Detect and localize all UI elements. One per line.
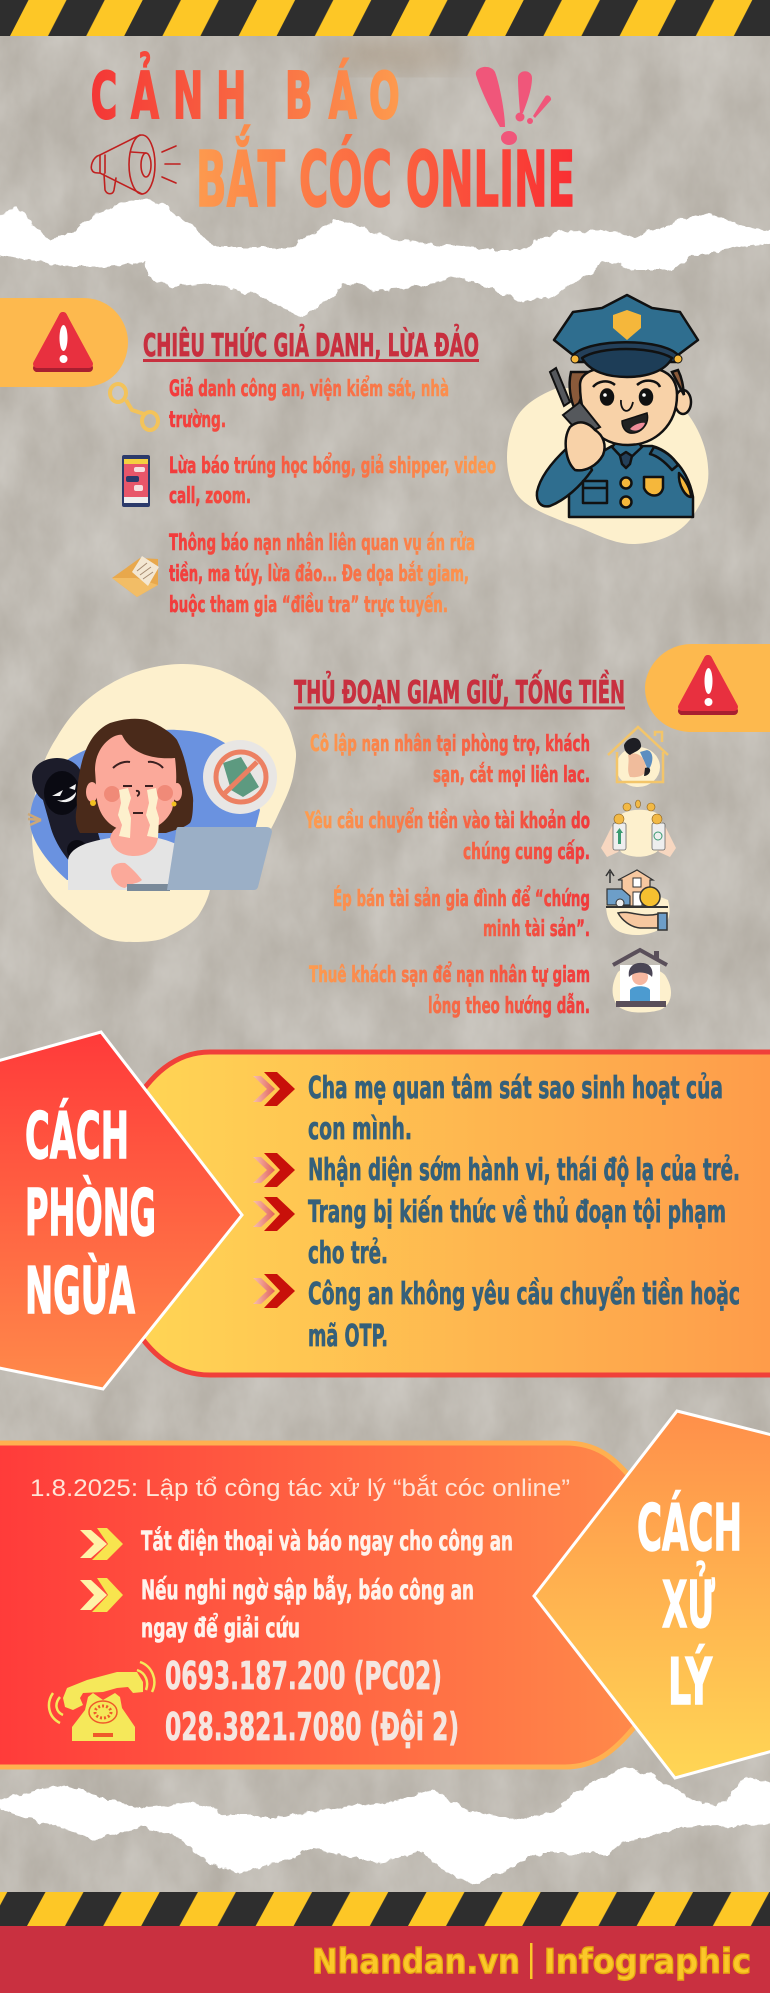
- alert rays: [28, 814, 41, 825]
- cream blob: [32, 664, 296, 942]
- icon: person confined at home: [613, 950, 671, 1013]
- icon: exclamation marks: [476, 67, 551, 145]
- face: [95, 735, 176, 832]
- footer bar: [0, 1926, 770, 1993]
- pentagon label: NGỪA: [25, 1253, 135, 1329]
- heading: [143, 323, 479, 364]
- instruction text: [141, 1526, 513, 1644]
- bullet chevrons: [80, 1528, 123, 1612]
- icon: phones and coins: [601, 800, 676, 857]
- earrings: [90, 800, 176, 806]
- laptop: [127, 827, 272, 891]
- text lines: Yêu cầu chuyển tiền vào tài khoản do: [304, 806, 590, 834]
- text lines: trường.: [169, 407, 226, 433]
- tears: [118, 788, 159, 838]
- torn paper band: bottom: [0, 1767, 770, 1886]
- text lines: Lừa báo trúng học bổng, giả shipper, video: [169, 451, 496, 479]
- icon: telephone: [49, 1662, 154, 1741]
- cheeks: [104, 785, 173, 802]
- top hazard stripe: [0, 0, 770, 36]
- heading: [294, 668, 625, 711]
- icon: phone chat: [122, 455, 150, 507]
- bottom hazard stripe: [0, 1892, 770, 1926]
- bullet chevrons: [253, 1072, 295, 1308]
- text lines: sạn, cắt mọi liên lac.: [433, 761, 590, 788]
- text lines: [169, 374, 496, 618]
- illustration: crying victim with hacker: [28, 664, 296, 942]
- icon: handcuffs: [110, 384, 158, 430]
- text lines: lỏng theo hướng dẫn.: [428, 992, 590, 1019]
- pentagon label: PHÒNG: [25, 1175, 156, 1251]
- instruction text: ngay để giải cứu: [141, 1611, 300, 1644]
- text lines: call, zoom.: [169, 483, 251, 509]
- gradient panel: [0, 1443, 640, 1767]
- pentagon label: XỬ: [662, 1561, 715, 1643]
- hand: [566, 422, 605, 470]
- ears and hair: [570, 370, 691, 414]
- pentagon label: [534, 1411, 770, 1778]
- hooded figure: [32, 758, 100, 880]
- date note: 1.8.2025: Lập tổ công tác xử lý “bắt cóc online”: [30, 1475, 570, 1502]
- pentagon label: [0, 1032, 242, 1389]
- icon: girl in house: [608, 727, 668, 787]
- blue blob: [30, 730, 260, 880]
- text lines: chúng cung cấp.: [463, 838, 590, 865]
- warning tab right: [645, 644, 770, 732]
- hotline numbers: 0693.187.200 (PC02): [165, 1654, 442, 1698]
- panel: cách phòng ngừa: [0, 1032, 770, 1389]
- text lines: tiền, ma túy, lừa đảo... Đe dọa bắt giam,: [169, 560, 469, 587]
- title: CẢNH BÁO: CẢNH BÁO: [91, 53, 400, 134]
- text lines: Thông báo nạn nhân liên quan vụ án rửa: [169, 530, 475, 556]
- cream blob: [507, 388, 708, 544]
- panel: cách xử lý: [0, 1411, 770, 1778]
- sweater: [68, 838, 178, 890]
- hotline numbers: 028.3821.7080 (Đội 2): [165, 1705, 459, 1749]
- icon: megaphone: [91, 135, 180, 194]
- icon: house car money: [606, 870, 670, 935]
- body: [537, 440, 693, 517]
- list text: [308, 1071, 740, 1354]
- warning tab left: [0, 298, 128, 387]
- text lines: Thuê khách sạn để nạn nhân tự giam: [309, 960, 590, 988]
- panel: thủ đoạn giam giữ: [294, 644, 770, 1019]
- text lines: buộc tham gia “điều tra” trực tuyến.: [169, 591, 448, 618]
- head: [580, 366, 677, 445]
- instruction text: Nếu nghi ngờ sập bẫy, báo công an: [141, 1575, 474, 1606]
- text lines: minh tài sản”.: [483, 916, 590, 942]
- woman hair: [76, 719, 193, 833]
- hotline numbers: [165, 1654, 459, 1749]
- hat: [554, 295, 698, 377]
- list text: con mình.: [308, 1112, 412, 1147]
- list text: mã OTP.: [308, 1319, 388, 1354]
- walkie-talkie: [550, 368, 600, 436]
- footer bar: Infographic: [544, 1942, 751, 1982]
- gradient list panel: [130, 1052, 770, 1375]
- instruction text: Tắt điện thoại và báo ngay cho công an: [141, 1526, 513, 1557]
- text lines: Ép bán tài sản gia đình để “chứng: [333, 884, 590, 912]
- hand: [111, 863, 142, 888]
- footer bar: Nhandan.vn: [312, 1942, 520, 1982]
- ears: [86, 782, 182, 802]
- text lines: [304, 731, 590, 1019]
- no-money sign: [203, 740, 277, 814]
- pentagon label: LÝ: [668, 1644, 713, 1720]
- pentagon label: CÁCH: [25, 1098, 129, 1174]
- illustration: police officer: [507, 295, 708, 544]
- list text: cho trẻ.: [308, 1236, 388, 1271]
- icon: envelope: [112, 556, 159, 597]
- facial features: [113, 762, 163, 813]
- torn paper band: top: [0, 198, 770, 317]
- text lines: Cô lập nạn nhân tại phòng trọ, khách: [310, 731, 590, 757]
- neck: [110, 822, 158, 858]
- heading: CHIÊU THỨC GIẢ DANH, LỪA ĐẢO: [143, 323, 479, 364]
- panel: chiêu thức giả danh: [0, 298, 496, 618]
- text lines: Giả danh công an, viện kiểm sát, nhà: [169, 374, 449, 402]
